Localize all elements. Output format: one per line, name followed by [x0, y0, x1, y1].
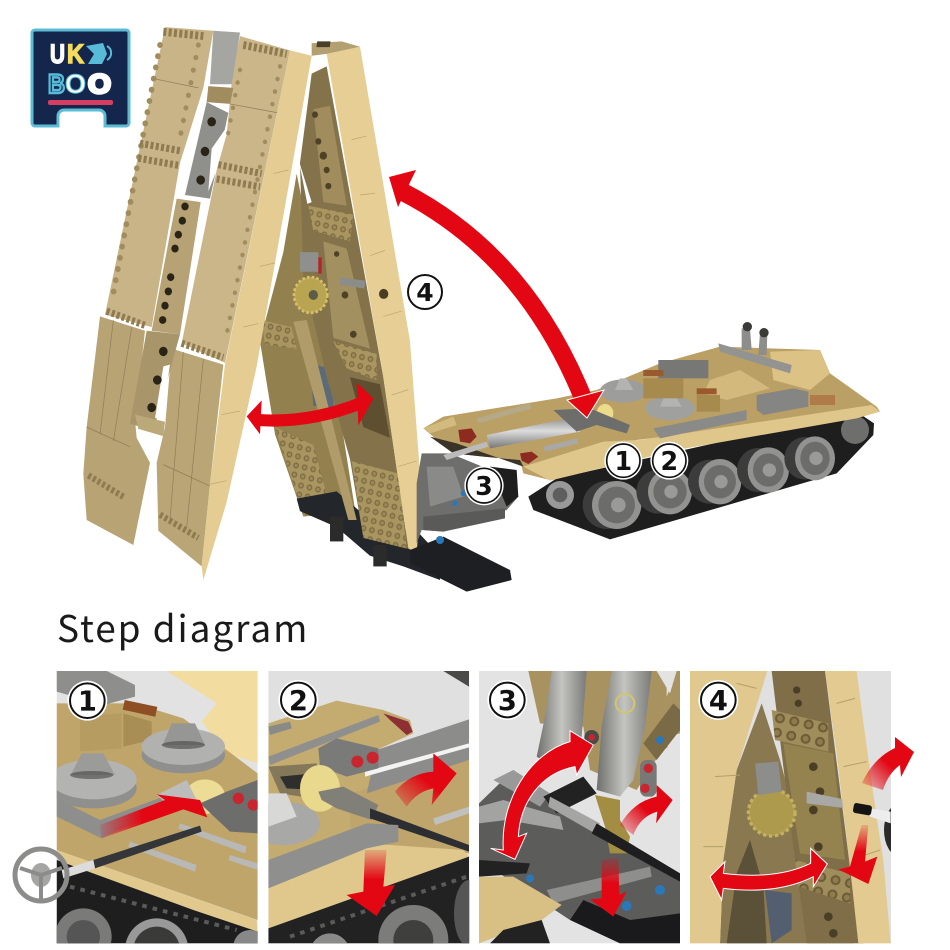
- silver axle end: [62, 860, 95, 878]
- step badge 2: [278, 680, 318, 720]
- number badge 4: [408, 275, 442, 309]
- step arrow: [100, 794, 207, 838]
- connector with red crosses: [318, 738, 379, 777]
- truss crossbar upper: [772, 710, 828, 752]
- number badge 3: [464, 466, 504, 505]
- centre cylinder: [597, 671, 652, 797]
- tracks: [528, 412, 874, 539]
- bridge rear panel: left prong upper: [105, 27, 213, 327]
- logo: UKBOQ brand badge: U: [50, 39, 65, 69]
- road wheels: [56, 908, 258, 944]
- step badge 2: 2: [289, 686, 308, 717]
- gold gear: [595, 795, 630, 853]
- step badge 4: [698, 680, 738, 720]
- number badge 4: 4: [416, 278, 434, 307]
- ramp in background: [167, 671, 258, 763]
- heading: Step diagram: Step diagram: [57, 599, 309, 653]
- bridge rear panel: lower right flap: [157, 349, 223, 566]
- step badge 1: [67, 681, 107, 721]
- track links: [70, 887, 237, 930]
- near hull deck: [350, 760, 469, 853]
- right bridge side strip: [210, 41, 422, 552]
- step badge 1: 1: [78, 687, 97, 718]
- white highlight on cylinder: [365, 743, 469, 777]
- central connecting beam: [130, 31, 240, 436]
- bridge rear panel: lower left flap: [83, 316, 150, 545]
- deck blocks: [57, 671, 157, 752]
- road wheels: [583, 436, 835, 529]
- yellow gear: [190, 779, 224, 814]
- tracks: [57, 860, 258, 943]
- hydraulic cylinder: [443, 403, 630, 464]
- grey arm: [318, 787, 378, 820]
- step panel 2: [268, 671, 470, 944]
- step badge 4: 4: [709, 686, 728, 717]
- tan hull corner: [479, 860, 562, 943]
- number badge 1: 1: [615, 446, 632, 476]
- stud strips across panels: [88, 32, 287, 538]
- idler wheel: [546, 481, 574, 509]
- turret disc right: [142, 723, 225, 773]
- connector with red crosses: [200, 780, 259, 833]
- black gear rack: [543, 777, 597, 813]
- step panel 3: [479, 671, 680, 943]
- base beam: [410, 537, 512, 592]
- sensors on the right: [584, 730, 657, 797]
- mechanism grey body: [479, 770, 680, 920]
- step panel 1: [50, 671, 267, 950]
- deck rails: [268, 715, 380, 765]
- panel seams: [87, 79, 278, 527]
- lower black beam: [570, 900, 680, 943]
- disc bottom left: [268, 793, 320, 845]
- far hull deck: [268, 701, 413, 873]
- number badge 3: 3: [475, 471, 493, 501]
- tan bridge parts behind: [528, 671, 680, 793]
- sprocket wheel: [841, 416, 869, 444]
- grey L plate: [268, 823, 398, 888]
- linkage: [268, 763, 317, 797]
- hull lip: [268, 843, 469, 928]
- logo: UKBOQ brand badge: [32, 30, 129, 126]
- yellow gear: [300, 765, 340, 812]
- handle axle: [853, 803, 891, 823]
- number badge 2: 2: [661, 446, 678, 476]
- step arrows: [347, 753, 457, 916]
- truss holes: [793, 686, 838, 938]
- front truss: [772, 671, 863, 943]
- tracks: [268, 857, 469, 943]
- light bulb mark: [616, 694, 634, 713]
- silver cross axle: [547, 867, 652, 903]
- main model: folding bridge: [83, 27, 440, 580]
- step badge 3: 3: [498, 686, 517, 717]
- dark corner part: [443, 671, 469, 687]
- bridge front truss: [293, 66, 408, 549]
- gear: [748, 789, 795, 836]
- logo: UKBOQ brand badge: O: [65, 69, 86, 99]
- bridge back truss: [260, 174, 357, 520]
- gear and sensor: [294, 252, 365, 313]
- hull deck: [57, 703, 258, 920]
- truss upper lit rail: [783, 743, 845, 860]
- steering wheel handle: [15, 849, 67, 901]
- arrow: large arc from bridge to tank: [389, 170, 604, 418]
- turret disc left: [50, 753, 137, 808]
- logo: UKBOQ brand badge: K: [67, 39, 84, 69]
- step arrows: [491, 731, 673, 917]
- left side strip: [690, 671, 767, 943]
- technic mechanism: [417, 453, 518, 544]
- step badge 3: [487, 680, 527, 720]
- blue grey links: [765, 890, 792, 943]
- red cap: [383, 713, 413, 735]
- gray cylinder: [367, 719, 469, 793]
- track links: [290, 877, 467, 937]
- hull lip: [57, 850, 258, 932]
- hull: [423, 347, 880, 481]
- number badge 2: [650, 442, 688, 480]
- black axle: [592, 823, 680, 882]
- truss crossbar lower: [795, 860, 850, 903]
- right side strip: [825, 671, 891, 943]
- arrow: bridge legs open and close: [247, 382, 373, 434]
- grey plate behind gear: [156, 780, 196, 800]
- stud rows along panels: [112, 45, 280, 334]
- grey axle: [548, 797, 600, 833]
- step panel 4: [690, 671, 916, 943]
- bridge rear panel: right prong upper: [182, 36, 290, 363]
- number badge 1: [604, 442, 642, 480]
- road wheels: [313, 880, 470, 944]
- main model: tank chassis: [410, 322, 880, 592]
- silver shaft: [807, 792, 847, 808]
- logo: UKBOQ brand badge: O: [88, 69, 111, 99]
- step arrows: [710, 825, 877, 900]
- arrow extending past panel 4: [862, 737, 914, 790]
- white gap in the truss: [299, 160, 312, 204]
- seam lines: [703, 683, 880, 857]
- rear lower lattice: [727, 840, 767, 943]
- grey sensor block: [755, 762, 782, 795]
- rear truss: [720, 703, 853, 943]
- hull deck details: [597, 322, 835, 438]
- black axle: [370, 808, 469, 852]
- bridge base: black beams behind legs: [297, 491, 440, 580]
- silver pins: [128, 823, 258, 872]
- grey deck plate: [57, 797, 163, 838]
- left cylinder: [537, 671, 587, 770]
- left bridge side strip: [202, 50, 312, 580]
- silver pins: [433, 807, 469, 825]
- wheel edge at right: [884, 803, 916, 857]
- black axle: [93, 826, 202, 868]
- blue pins: [526, 736, 665, 911]
- logo: UKBOQ brand badge: B: [48, 69, 65, 99]
